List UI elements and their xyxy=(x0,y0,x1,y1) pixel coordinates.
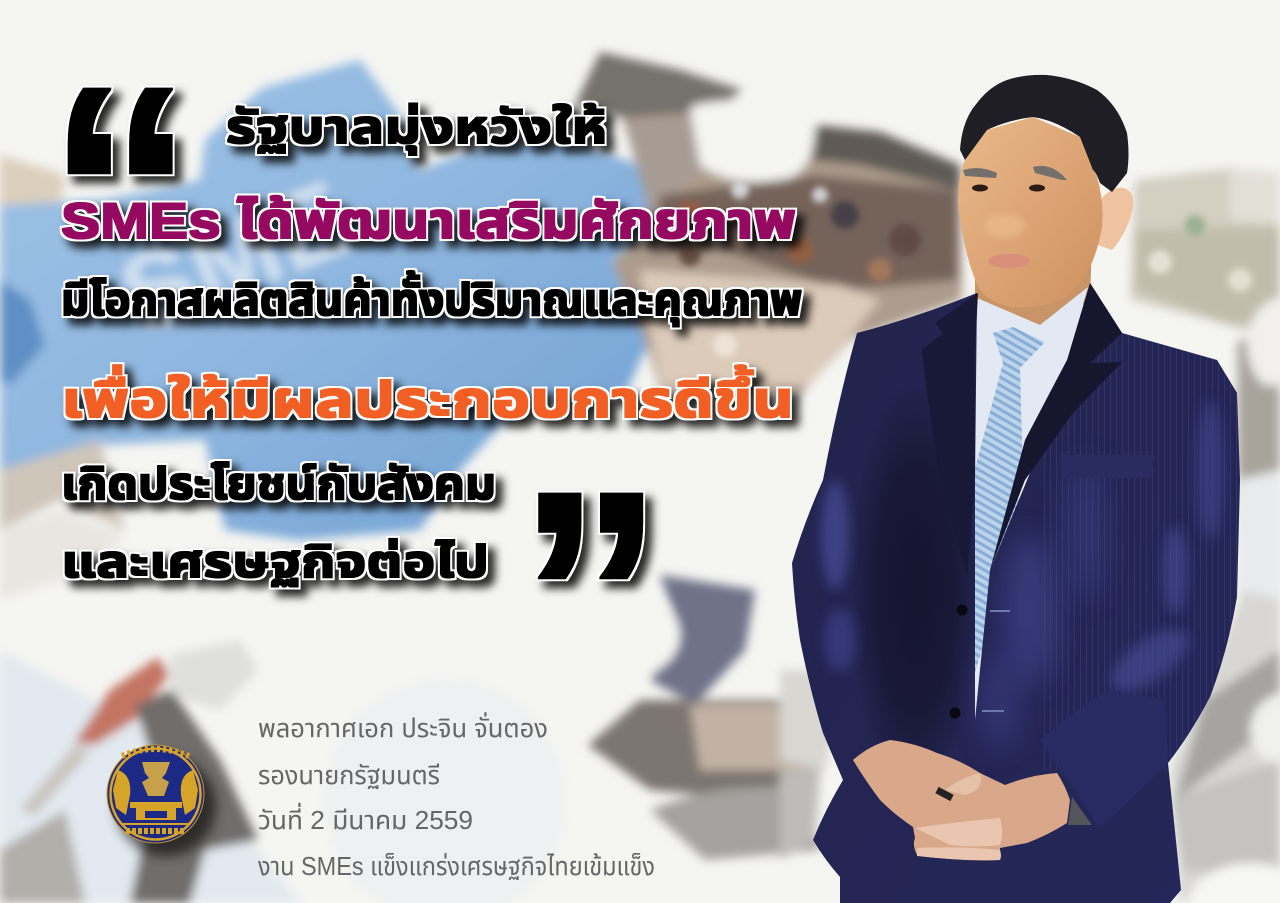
right sleeve shadow xyxy=(1040,690,1168,828)
quote line 6: และเศรษฐกิจต่อไป xyxy=(61,538,489,587)
signature block xyxy=(258,711,655,881)
left blue wedge xyxy=(0,280,45,385)
event name: งาน SMEs แข็งแกร่งเศรษฐกิจไทยเข้มแข็ง xyxy=(258,851,655,881)
close quotation mark: ” xyxy=(517,428,664,764)
buttons xyxy=(956,604,968,616)
puzzle piece: food photo centre xyxy=(612,112,962,395)
quote line 2: magenta: SMEs ได้พัฒนาเสริมศักยภาพ xyxy=(61,193,796,249)
pocket xyxy=(1060,455,1155,478)
speaker name: พลอากาศเอก ประจิน จั่นตอง xyxy=(258,711,548,743)
suit jacket xyxy=(792,283,1240,903)
quote line 5: เกิดประโยชน์กับสังคม xyxy=(61,460,496,509)
puzzle piece: lower centre blue-grey xyxy=(650,575,755,705)
open quotation mark: “ xyxy=(47,23,194,359)
puzzle piece: blue SMEs xyxy=(0,60,652,540)
buttonholes xyxy=(982,611,1010,711)
shirt xyxy=(966,287,1088,722)
dark stand xyxy=(130,690,258,903)
jacket lapels xyxy=(922,293,978,577)
quote heading xyxy=(61,101,802,587)
pen red cap xyxy=(74,657,169,745)
beige strip behind blue xyxy=(0,155,65,210)
icon: government seal xyxy=(107,745,216,856)
quote line 3: มีโอกาสผลิตสินค้าทั้งปริมาณและคุณภาพ xyxy=(61,271,802,327)
grey band under lower right xyxy=(588,700,800,800)
tie xyxy=(968,327,1045,695)
white puzzle knob over food xyxy=(690,100,815,182)
hair xyxy=(960,75,1128,192)
nose xyxy=(985,214,1025,238)
eyes xyxy=(972,184,988,192)
ear xyxy=(1098,188,1133,250)
watch xyxy=(1068,797,1092,825)
light bulge xyxy=(170,640,258,710)
quote line 1: รัฐบาลมุ่งหวังให้ xyxy=(226,101,607,155)
light area lower left xyxy=(0,650,300,903)
mottled food detail xyxy=(676,181,1252,357)
suit shading xyxy=(821,330,1240,800)
speaker title: รองนายกรัฐมนตรี xyxy=(258,760,440,790)
puzzle piece: food photo right xyxy=(1130,168,1280,345)
eyebrows xyxy=(963,166,1067,180)
neck xyxy=(975,240,1092,340)
beige patch left xyxy=(0,440,125,530)
faint SME lettering: SME xyxy=(103,156,366,356)
date: วันที่ 2 มีนาคม 2559 xyxy=(258,802,473,835)
portrait of man in suit xyxy=(792,75,1240,903)
mouth xyxy=(988,254,1030,268)
puzzle piece: lower right grey xyxy=(1170,340,1280,903)
hands xyxy=(853,740,1070,860)
quote line 4: orange: เพื่อให้มีผลประกอบการดีขึ้น xyxy=(61,365,794,428)
face xyxy=(958,117,1102,308)
puzzle piece: dark cap top xyxy=(575,52,742,122)
